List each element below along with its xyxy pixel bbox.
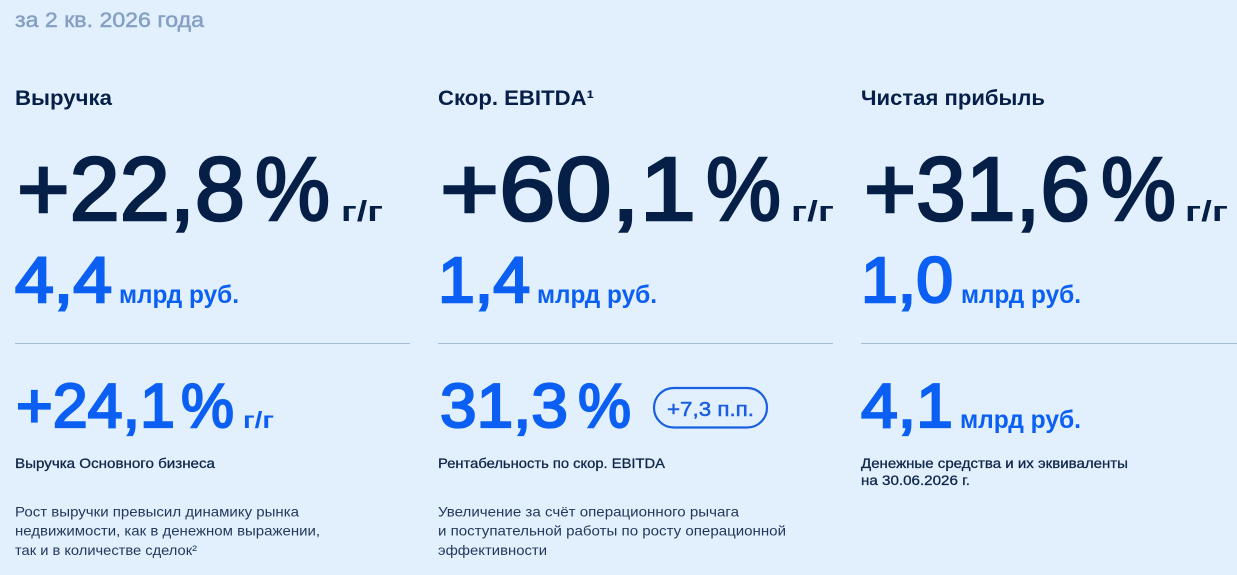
badge: margin change — [654, 388, 767, 428]
heading: net profit: Чистая прибыль — [861, 87, 1045, 110]
text block: revenue commentary: Рост выручки превысил динамику рынка — [15, 504, 299, 520]
metric: EBITDA amount: млрд руб. — [537, 281, 657, 309]
metric: EBITDA amount — [438, 244, 657, 316]
label: cash and equivalents — [861, 455, 1128, 488]
metric: core business growth — [16, 372, 274, 441]
label: core business revenue: Выручка Основного бизнеса — [15, 455, 215, 471]
metric: revenue amount — [15, 244, 239, 316]
metric: net profit amount: 1,0 — [861, 244, 953, 316]
metric: revenue growth: % — [255, 140, 330, 240]
metric: EBITDA margin — [440, 372, 631, 441]
metric: revenue amount: млрд руб. — [119, 281, 239, 309]
metric: net profit growth: % — [1101, 140, 1176, 240]
metric: EBITDA margin: % — [578, 372, 631, 441]
metric: EBITDA growth: г/г — [791, 196, 834, 228]
metric: cash: 4,1 — [861, 372, 953, 441]
metric: cash — [861, 372, 1081, 441]
text block: revenue commentary: недвижимости, как в денежном выражении, — [15, 522, 320, 538]
metric: net profit amount — [861, 244, 1081, 316]
metric: net profit growth: +31,6 — [864, 140, 1090, 240]
metric: revenue growth — [17, 140, 383, 240]
heading: revenue: Выручка — [15, 87, 112, 110]
text block: revenue commentary — [15, 504, 320, 558]
label: cash and equivalents: на 30.06.2026 г. — [861, 472, 970, 488]
metric: core business growth: +24,1 — [16, 372, 175, 441]
text block: EBITDA commentary: и поступательной работы по росту операционной — [438, 522, 786, 538]
text block: EBITDA commentary: эффективности — [438, 542, 547, 558]
metric: EBITDA amount: 1,4 — [438, 244, 530, 316]
metric: EBITDA growth — [440, 140, 834, 240]
metric: core business growth: г/г — [243, 407, 274, 433]
metric: EBITDA growth: +60,1 — [440, 140, 696, 240]
badge: margin change: +7,3 п.п. — [667, 399, 754, 421]
heading: adjusted EBITDA: Скор. EBITDA¹ — [438, 87, 594, 110]
period heading: за 2 кв. 2026 года — [15, 9, 204, 32]
label: EBITDA margin: Рентабельность по скор. EBITDA — [438, 455, 666, 471]
text block: EBITDA commentary — [438, 504, 786, 558]
text block: EBITDA commentary: Увеличение за счёт операционного рычага — [438, 504, 739, 520]
metric: revenue amount: 4,4 — [15, 244, 112, 316]
metric: net profit growth: г/г — [1185, 196, 1228, 228]
metric: net profit growth — [864, 140, 1228, 240]
panel: revenue — [15, 87, 410, 558]
text block: revenue commentary: так и в количестве сделок² — [15, 542, 197, 558]
metric: EBITDA growth: % — [706, 140, 781, 240]
metric: revenue growth: г/г — [341, 196, 383, 228]
label: cash and equivalents: Денежные средства и их эквиваленты — [861, 455, 1128, 471]
metric: EBITDA margin: 31,3 — [440, 372, 568, 441]
metric: revenue growth: +22,8 — [17, 140, 245, 240]
metric: cash: млрд руб. — [960, 406, 1081, 434]
panel: net profit — [861, 87, 1237, 488]
metric: core business growth: % — [181, 372, 234, 441]
metric: net profit amount: млрд руб. — [961, 281, 1081, 309]
panel: adjusted EBITDA — [438, 87, 834, 558]
